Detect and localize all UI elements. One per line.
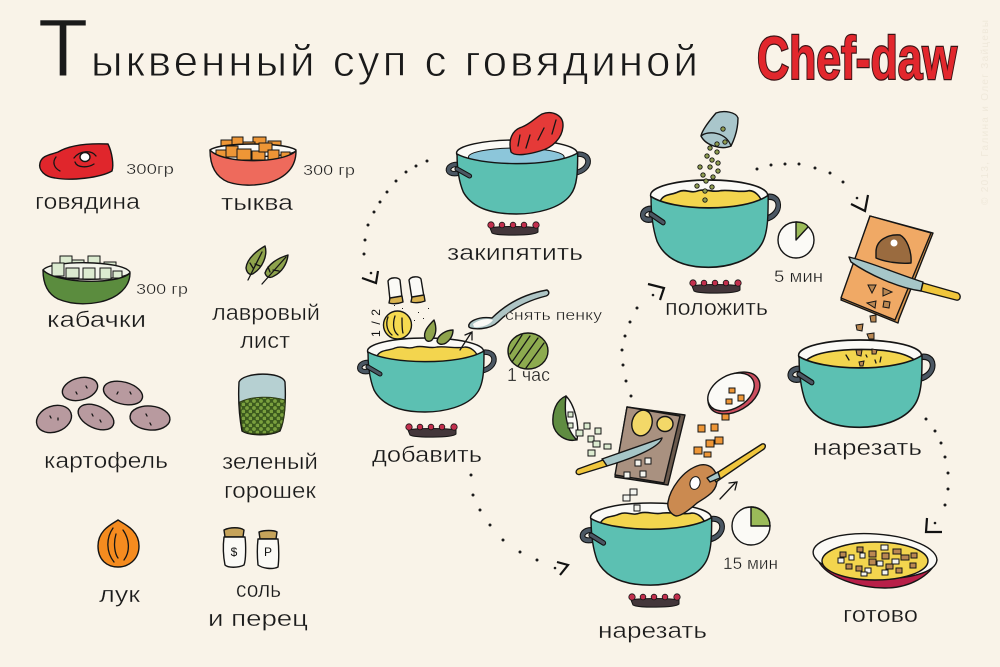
ingredient: salt and pepper: и перец — [208, 606, 308, 631]
ingredient: potatoes — [33, 374, 171, 473]
step: board with meat and knife — [841, 216, 960, 339]
step: add spices — [360, 277, 603, 467]
step: boil: закипятить — [447, 240, 583, 265]
dotted arrow: to boil — [362, 160, 428, 283]
ingredient: beef — [35, 144, 174, 214]
step: cut and add to soup: 15 мин — [723, 554, 778, 573]
step: add spices: снять пенку — [505, 307, 603, 324]
ingredient: potatoes: картофель — [44, 448, 168, 473]
step: add peas: 5 мин — [774, 267, 823, 286]
ingredient: green peas jar: зеленый — [222, 449, 318, 474]
step: add spices: 1/2 — [369, 309, 383, 337]
ingredient: zucchini — [43, 256, 188, 332]
ingredient: zucchini: 300 гр — [136, 281, 188, 298]
ingredient: pumpkin: тыква — [221, 190, 294, 215]
ingredient: green peas jar: горошек — [224, 478, 316, 503]
ingredient: bay leaf: лист — [240, 328, 290, 353]
step: cut and add to soup — [553, 363, 778, 643]
step: cut and add to soup: нарезать — [598, 618, 707, 643]
title: Тыквенный суп с говядиной — [38, 3, 698, 94]
step: boil — [447, 113, 588, 265]
finished dish: готово — [843, 602, 918, 627]
step: add peas: положить — [665, 295, 768, 320]
step: final pot — [790, 340, 933, 460]
copyright: © 2013, Галина и Олег Зайцевы — [980, 20, 991, 205]
step: add peas — [643, 112, 823, 320]
ingredient: salt and pepper: $ — [231, 545, 238, 559]
ingredient: beef: говядина — [35, 189, 141, 214]
ingredient: salt and pepper — [208, 528, 308, 631]
dotted arrow: to finished dish — [924, 418, 950, 532]
finished dish — [812, 530, 938, 627]
ingredient: salt and pepper: P — [264, 545, 272, 559]
ingredient: onion — [98, 520, 140, 607]
ingredient: bay leaf: лавровый — [212, 300, 320, 325]
ingredient: beef: 300гр — [126, 161, 174, 178]
step: add spices: добавить — [372, 442, 482, 467]
ingredient: salt and pepper: соль — [236, 577, 281, 602]
step: final pot: нарезать — [813, 435, 922, 460]
dotted arrow: to step three — [470, 474, 568, 575]
dotted arrow: to step four — [620, 284, 664, 398]
dotted arrow: to step five — [756, 162, 868, 211]
step: add spices: 1 час — [507, 365, 550, 385]
ingredient: pumpkin: 300 гр — [303, 162, 355, 179]
ingredient: onion: лук — [99, 582, 140, 607]
ingredient: green peas jar — [222, 374, 318, 503]
ingredient: pumpkin — [210, 137, 355, 215]
ingredient: bay leaf — [212, 246, 320, 353]
ingredient: zucchini: кабачки — [47, 307, 146, 332]
